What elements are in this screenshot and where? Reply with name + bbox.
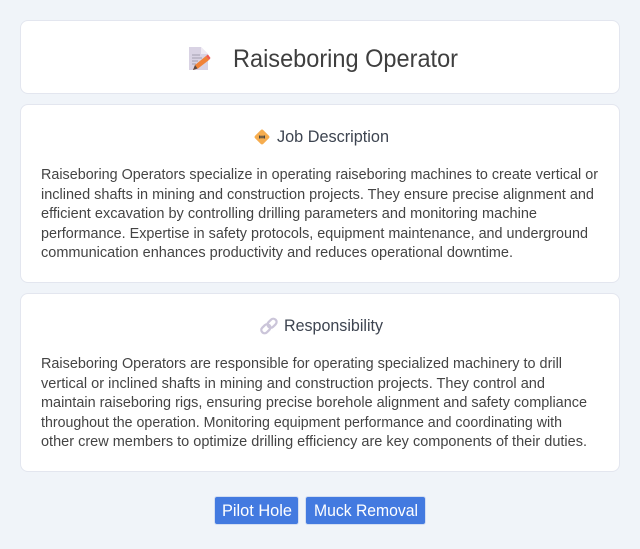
text block: job description: communication enhances productivity and reduces operational downtime. [41, 245, 513, 261]
text block: responsibility: vertical or inclined shafts in mining and construction projects. They control and [41, 376, 545, 392]
icon: construction diamond sign [254, 130, 270, 144]
icon: document with pencil [189, 47, 210, 70]
text block: responsibility: throughout the operation. Monitoring equipment performance and coordinating with [41, 415, 562, 431]
heading: Raiseboring Operator: Raiseboring Operator [233, 46, 458, 73]
text block: responsibility: Raiseboring Operators are responsible for operating specialized machinery to drill [41, 356, 562, 372]
text block: responsibility: other crew members to optimize drilling efficiency are key components of their duties. [41, 434, 587, 450]
text block: job description: efficient excavation by controlling drilling parameters and monitoring machine [41, 206, 537, 222]
icon: chain link [260, 318, 278, 334]
tag: Muck Removal [305, 496, 426, 525]
text block: job description: inclined shafts in mining and construction projects. They ensure precise alignment and [41, 187, 594, 203]
text block: job description: performance. Expertise in safety protocols, equipment maintenance, and underground [41, 226, 588, 242]
text block: responsibility: maintain raiseboring rigs, ensuring precise borehole alignment and safety compliance [41, 395, 587, 411]
text block: job description: Raiseboring Operators specialize in operating raiseboring machines to create vertical or [41, 167, 598, 183]
tag: Muck Removal: Muck Removal [314, 502, 418, 520]
heading: responsibility: Responsibility [284, 317, 384, 335]
panel: title [20, 20, 620, 94]
panel: job description [20, 104, 620, 283]
text block: job description [41, 167, 598, 261]
tag: Pilot Hole [214, 496, 299, 525]
tag: Pilot Hole: Pilot Hole [222, 502, 292, 520]
heading: job description: Job Description [277, 128, 389, 146]
panel: responsibility [20, 293, 620, 472]
text block: responsibility [41, 356, 587, 450]
